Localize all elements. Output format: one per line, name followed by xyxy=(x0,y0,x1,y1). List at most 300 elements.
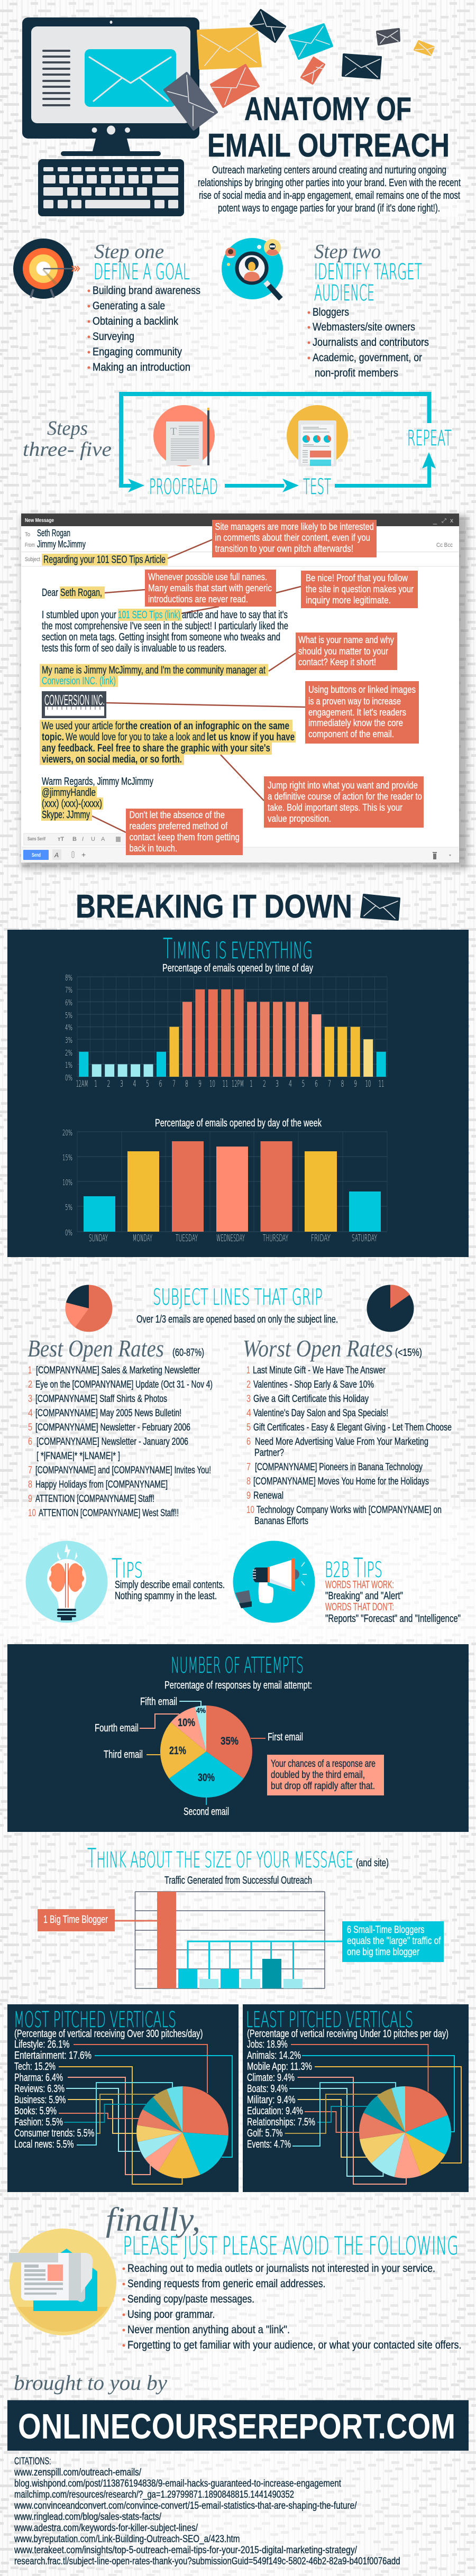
callout: buttons: is a proven way to increase xyxy=(308,695,401,707)
text block: b2b tips xyxy=(325,1553,461,1625)
list: worst open rates: Renewal xyxy=(253,1490,283,1501)
pie chart: responses by attempt: 35% xyxy=(221,1735,239,1747)
email body: compliment paragraph: I stumbled upon your xyxy=(42,609,116,621)
legend list: Reviews: 6.3% xyxy=(14,2083,65,2095)
bar chart: percentage by hour: 1% xyxy=(65,1060,72,1070)
list: worst open rates: Valentines - Shop Early & Save 10% xyxy=(253,1379,374,1390)
callout: your name: should you matter to your xyxy=(298,645,388,657)
bar chart: percentage by hour: 2 xyxy=(107,1079,110,1089)
callout: buttons: engagement. It let's readers xyxy=(308,707,406,718)
callout: jump right in: Jump right into what you want and provide xyxy=(268,780,418,791)
email body: compliment paragraph: article and have to say that it's xyxy=(182,609,288,621)
list: step one goals: Generating a sale xyxy=(93,300,165,312)
pie chart: responses by attempt: Fourth email xyxy=(95,1722,139,1734)
text block: b2b tips: WORDS THAT WORK: xyxy=(325,1579,394,1591)
list: worst open rates: 5 xyxy=(246,1422,251,1433)
legend list xyxy=(247,2039,315,2150)
chart title: time of day: Percentage of emails opened by time of day xyxy=(162,962,313,974)
email body: greeting: Seth Rogan, xyxy=(60,587,102,599)
window title bar: New Message xyxy=(25,518,54,524)
citations: www.terakeet.com/insights/top-5-outreach-email-tips-for-your-2015-digital-marketing-strategy/ xyxy=(14,2545,358,2556)
callout: full names xyxy=(145,570,276,607)
bar chart: percentage by weekday: SATURDAY xyxy=(352,1233,377,1244)
list: worst open rates: 9 xyxy=(246,1490,251,1501)
bar chart: percentage by weekday: 5% xyxy=(65,1203,72,1212)
callout: small time bloggers: one big time blogger xyxy=(347,1947,420,1958)
label: steps proofread test repeat: PROOFREAD xyxy=(149,475,218,499)
callout: small time bloggers xyxy=(342,1921,444,1962)
email toolbar: A xyxy=(101,836,105,842)
list: worst open rates: Worst Open Rates xyxy=(243,1335,393,1362)
bar chart: percentage by hour: 7 xyxy=(172,1079,176,1089)
list: best open rates: Happy Holidays from [COMPANYNAME] xyxy=(35,1479,168,1490)
bar chart: percentage by weekday: SUNDAY xyxy=(89,1233,108,1244)
pie chart: responses by attempt: 30% xyxy=(198,1772,215,1784)
email toolbar: Sans Serif xyxy=(28,836,46,842)
text block: tips xyxy=(112,1553,225,1602)
callout: chances of response: Your chances of a response are xyxy=(271,1758,376,1770)
window title bar xyxy=(21,514,459,526)
subheading: (Percentage of vertical receiving Over 300 pitches/day) xyxy=(14,2028,203,2040)
icon: megaphone in hand xyxy=(233,1541,315,1622)
list: best open rates: 2 xyxy=(28,1379,32,1390)
bar chart: percentage by hour xyxy=(65,973,387,1089)
heading: think about the size xyxy=(87,1843,389,1886)
list: best open rates: 4 xyxy=(28,1408,33,1419)
list: best open rates: Best Open Rates xyxy=(28,1335,164,1362)
heading: finally: finally, xyxy=(106,2201,200,2238)
pie chart: most pitched xyxy=(136,2086,228,2178)
callout: be nice: inquiry more legitimate. xyxy=(306,594,391,606)
pie chart: responses by attempt xyxy=(95,1696,303,1818)
legend list: Climate: 9.4% xyxy=(247,2072,295,2084)
list: best open rates: [COMPANYNAME] May 2005 News Bulletin! xyxy=(35,1408,181,1419)
bar chart: percentage by hour: 8 xyxy=(185,1079,188,1089)
bar chart: percentage by hour: 5 xyxy=(301,1079,305,1089)
text block: tips: TIPS xyxy=(112,1553,143,1584)
logo: conversion inc xyxy=(42,691,106,718)
email body: signature: Warm Regards, Jimmy McJimmy xyxy=(42,776,153,787)
list: best open rates: [COMPANYNAME] Newsletter - February 2006 xyxy=(35,1422,190,1433)
email body: signature: (xxx) (xxx)-(xxxx) xyxy=(42,798,102,810)
text block: intro xyxy=(198,164,461,214)
list: things to avoid: Never mention anything about a "link". xyxy=(127,2324,290,2336)
panel: number of attempts xyxy=(7,1644,469,1832)
icon: proofread document: T xyxy=(170,426,177,437)
list: step one goals xyxy=(88,285,200,373)
legend list: Lifestyle: 26.1% xyxy=(14,2039,70,2050)
legend list: Consumer trends: 5.5% xyxy=(14,2128,95,2139)
legend list: Relationships: 7.5% xyxy=(247,2116,315,2128)
list: worst open rates: Partner? xyxy=(254,1447,284,1459)
list: step two audience: Journalists and contributors xyxy=(313,336,429,349)
bar chart: percentage by weekday: MONDAY xyxy=(133,1233,152,1244)
list: best open rates: [ *|FNAME|* *|LNAME|* ] xyxy=(36,1451,120,1462)
callout: your name: What is your name and why xyxy=(298,634,395,645)
citations: mailchimp.com/resources/research/?_ga=1.29799871.1890848815.1441490352 xyxy=(14,2489,294,2500)
email toolbar: A xyxy=(54,851,59,859)
list: step one goals: Obtaining a backlink xyxy=(93,315,178,327)
legend list: Boats: 9.4% xyxy=(247,2083,288,2095)
legend list: Fashion: 5.5% xyxy=(14,2116,63,2128)
list: step one goals: Making an introduction xyxy=(93,361,190,373)
pie chart: responses by attempt: First email xyxy=(268,1731,303,1743)
email body: value proposition: We used your article for xyxy=(42,720,124,732)
email toolbar: B xyxy=(72,836,77,842)
heading: subject lines that grip xyxy=(136,1284,338,1325)
bar chart: percentage by weekday xyxy=(62,1128,387,1244)
bar chart: percentage by hour: 6% xyxy=(65,998,72,1007)
callout: be nice: the site in question makes your xyxy=(306,583,414,594)
callout: small time bloggers: equals the "large" traffic of xyxy=(347,1936,441,1947)
icon: magnifying glass over people xyxy=(222,238,283,299)
email body: value proposition: We would love for you to take a look and xyxy=(66,731,205,743)
list: worst open rates: 4 xyxy=(246,1408,251,1419)
heading: breaking it down: BREAKING IT DOWN xyxy=(76,888,352,925)
email body: compliment paragraph: 101 SEO Tips (link) xyxy=(118,609,180,621)
bar chart: percentage by hour: 4% xyxy=(65,1023,72,1032)
text block: b2b tips: WORDS THAT DON'T: xyxy=(325,1601,394,1613)
heading: steps three-five: Steps xyxy=(47,417,88,439)
email body: greeting: Dear xyxy=(42,587,58,599)
icon: target with arrow xyxy=(13,239,79,299)
legend list: Military: 9.4% xyxy=(247,2094,296,2106)
list: worst open rates: (<15%) xyxy=(395,1347,422,1359)
citations: CITATIONS: xyxy=(14,2456,51,2467)
list: worst open rates: 2 xyxy=(246,1379,251,1390)
callout: jump right in: a definitive course of action for the reader to xyxy=(268,791,422,802)
list: worst open rates: 10 xyxy=(246,1505,254,1516)
icon: flying envelopes xyxy=(164,10,434,130)
legend list xyxy=(14,2039,95,2150)
list: worst open rates: 3 xyxy=(246,1394,251,1405)
connector lines xyxy=(285,2045,461,2184)
list: worst open rates: 6 xyxy=(246,1436,251,1447)
email body: value proposition: any feedback. Feel free to share the graphic with your site's xyxy=(42,742,270,754)
legend list: Books: 5.9% xyxy=(14,2105,57,2117)
email body: value proposition: the creation of an infographic on the same xyxy=(125,720,289,732)
text block: b2b tips: B2B TIPS xyxy=(325,1553,382,1583)
email address fields: From xyxy=(25,542,35,548)
email toolbar xyxy=(22,833,459,863)
bar chart: percentage by hour: 11 xyxy=(379,1079,384,1089)
panel: most pitched verticals xyxy=(7,2004,239,2192)
email address fields xyxy=(25,528,453,566)
email toolbar: U xyxy=(91,836,95,842)
email body: value proposition: let us know if you have xyxy=(207,731,295,743)
list: best open rates: [COMPANYNAME] and [COMPANYNAME] Invites You! xyxy=(35,1465,211,1476)
callout: buttons: component of the email. xyxy=(308,728,394,739)
heading: number of attempts: NUMBER OF ATTEMPTS xyxy=(171,1653,304,1678)
list: things to avoid: Sending requests from generic email addresses. xyxy=(127,2278,325,2290)
callout: jump right in: value proposition. xyxy=(268,813,331,824)
pie: best open rate xyxy=(66,1285,112,1332)
bar chart: percentage by hour: 9 xyxy=(198,1079,202,1089)
callout: contact methods: back in touch. xyxy=(129,842,177,854)
list: step two audience xyxy=(308,306,429,379)
email body: value proposition xyxy=(40,720,296,765)
bar chart: percentage by hour: 7 xyxy=(328,1079,331,1089)
list: best open rates: 10 xyxy=(28,1508,36,1519)
bar chart: percentage by hour: 1 xyxy=(94,1079,97,1089)
callout: small time bloggers: 6 Small-Time Bloggers xyxy=(347,1924,424,1936)
bar chart: percentage by hour: 4 xyxy=(133,1079,136,1089)
bar chart: percentage by hour: 5% xyxy=(65,1011,72,1020)
bar chart: percentage by weekday: TUESDAY xyxy=(176,1233,198,1244)
email body: greeting xyxy=(42,586,105,599)
window title bar: _ xyxy=(433,517,437,525)
bar chart: percentage by hour: 12PM xyxy=(232,1079,244,1089)
list: worst open rates: Last Minute Gift - We Have The Answer xyxy=(253,1365,386,1376)
pie: worst open rate xyxy=(367,1285,414,1332)
legend list: Entertainment: 17.6% xyxy=(14,2050,91,2061)
bar chart: percentage by weekday: 0% xyxy=(65,1228,72,1237)
bar chart: percentage by hour: 0% xyxy=(65,1073,72,1083)
list: best open rates: [COMPANYNAME] Staff Shirts & Photos xyxy=(35,1394,167,1405)
heading: finally xyxy=(106,2201,459,2261)
callout: full names: introductions are never read. xyxy=(148,593,248,604)
list: best open rates xyxy=(28,1335,213,1519)
email address fields: Subject xyxy=(25,556,40,563)
callout: contact methods xyxy=(126,809,243,855)
list: worst open rates: Valentine's Day Salon and Spa Specials! xyxy=(253,1408,388,1419)
heading: step one: Step one xyxy=(94,241,164,263)
email body: compliment paragraph: tests this form of seo daily is invaluable to us readers. xyxy=(42,643,226,654)
email body: value proposition: viewers, on social media, or so forth. xyxy=(42,754,182,765)
callout: your name xyxy=(296,632,397,670)
list: worst open rates: 7 xyxy=(246,1462,251,1473)
list: best open rates: [COMPANYNAME] Sales & Marketing Newsletter xyxy=(36,1365,200,1376)
email body: compliment paragraph: the most comprehensive I've seen in the subject! I particularly liked the xyxy=(42,620,288,632)
bar chart: percentage by hour: 4 xyxy=(289,1079,292,1089)
pie chart: responses by attempt: 21% xyxy=(169,1745,186,1757)
bar chart: percentage by hour: 5 xyxy=(146,1079,149,1089)
bar chart: percentage by weekday: 10% xyxy=(62,1178,72,1187)
legend list: Pharma: 6.4% xyxy=(14,2072,63,2084)
list: things to avoid: Using poor grammar. xyxy=(127,2308,215,2321)
text block: b2b tips: "Breaking" and "Alert" xyxy=(325,1590,403,1602)
email body: introduction: Conversion INC. (link) xyxy=(42,675,116,687)
list: step two audience: Webmasters/site owners xyxy=(313,321,415,333)
panel: example email window xyxy=(21,514,468,869)
heading: subject lines that grip: SUBJECT LINES THAT GRIP xyxy=(153,1284,323,1310)
icon: desktop computer with keyboard xyxy=(22,17,199,216)
heading: steps three-five: three- five xyxy=(23,438,112,461)
pie chart: responses by attempt: Third email xyxy=(104,1749,143,1761)
list: best open rates: ATTENTION [COMPANYNAME] West Staff!! xyxy=(39,1508,179,1519)
list: worst open rates: Need More Advertising Value From Your Marketing xyxy=(255,1436,428,1447)
callout: contact methods: Don't let the absence of the xyxy=(129,809,225,820)
callout: subject line: in comments about their content, even if you xyxy=(215,532,370,543)
heading: think about the size: Traffic Generated from Successful Outreach xyxy=(164,1875,312,1886)
email body: introduction: My name is Jimmy McJimmy, and I'm the community manager at xyxy=(42,664,266,676)
list: worst open rates: 1 xyxy=(246,1365,250,1376)
list: best open rates: 1 xyxy=(28,1365,32,1376)
callout: buttons xyxy=(305,681,419,744)
legend list: Events: 4.7% xyxy=(247,2139,291,2150)
callout: chances of response: but drop off rapidly after that. xyxy=(271,1781,375,1792)
legend list: Tech: 15.2% xyxy=(14,2061,56,2073)
callout: be nice: Be nice! Proof that you follow xyxy=(306,572,408,583)
bar chart: percentage by hour: 2% xyxy=(65,1048,72,1058)
heading: think about the size: (and site) xyxy=(356,1857,389,1869)
bar chart: percentage by weekday: FRIDAY xyxy=(311,1233,331,1244)
window title bar: x xyxy=(450,517,453,524)
callout: buttons: Using buttons or linked images xyxy=(308,684,416,695)
heading: step one: DEFINE A GOAL xyxy=(94,259,190,285)
citations xyxy=(14,2456,400,2567)
bar chart: percentage by weekday: 15% xyxy=(62,1153,72,1162)
citations: www.adestra.com/keywords-for-killer-subject-lines/ xyxy=(14,2523,198,2534)
legend list: Business: 5.9% xyxy=(14,2094,66,2106)
arrows: repeat loop xyxy=(119,394,436,492)
list: worst open rates xyxy=(243,1335,452,1527)
email body: value proposition: topic. xyxy=(42,731,64,743)
citations: blog.wishpond.com/post/113876194838/9-email-hacks-guaranteed-to-increase-engagement xyxy=(14,2478,342,2489)
email toolbar: Send xyxy=(32,852,41,858)
email body: compliment paragraph xyxy=(42,609,288,654)
bar chart: percentage by hour: 3 xyxy=(120,1079,123,1089)
heading: most pitched: MOST PITCHED VERTICALS xyxy=(14,2007,176,2032)
callout: chances of response: doubled by the third email, xyxy=(271,1770,365,1781)
email toolbar: + xyxy=(81,850,86,859)
list: best open rates: [COMPANYNAME] Newsletter - January 2006 xyxy=(36,1436,188,1447)
bar chart: percentage by hour: 1 xyxy=(250,1079,253,1089)
callout: full names: Whenever possible use full names. xyxy=(148,571,267,582)
legend list: Local news: 5.5% xyxy=(14,2139,74,2150)
list: step two audience: non-profit members xyxy=(315,367,398,379)
list: step one goals: Building brand awareness xyxy=(93,285,200,297)
list: worst open rates: 8 xyxy=(246,1476,251,1487)
bar chart: percentage by hour: 12AM xyxy=(76,1079,88,1089)
callout: jump right in xyxy=(264,776,424,828)
legend list: Education: 9.4% xyxy=(247,2105,303,2117)
bar chart: percentage by weekday: THURSDAY xyxy=(263,1233,288,1244)
email body: introduction xyxy=(40,664,268,687)
callout: contact methods: readers preferred method of xyxy=(129,820,228,831)
bar chart: percentage by hour: 8% xyxy=(65,973,72,983)
heading: steps three-five xyxy=(23,417,112,461)
callout: contact methods: contact keep them from getting xyxy=(129,831,240,842)
bar chart: percentage by hour: 2 xyxy=(263,1079,266,1089)
panel: example email window: CONVERSION INC. xyxy=(44,692,105,708)
list: best open rates: Eye on the [COMPANYNAME] Update (Oct 31 - Nov 4) xyxy=(35,1379,213,1390)
text block: tips: Nothing spammy in the least. xyxy=(115,1590,217,1602)
bar chart: percentage by hour: 10 xyxy=(365,1079,371,1089)
chart title: day of the week: Percentage of emails opened by day of the week xyxy=(155,1117,322,1129)
bar chart: percentage by hour: 6 xyxy=(159,1079,162,1089)
email toolbar: тT xyxy=(58,836,64,842)
list: step two audience: Bloggers xyxy=(313,306,349,318)
list: best open rates: 3 xyxy=(28,1394,32,1405)
bar chart: percentage by hour: 8 xyxy=(341,1079,344,1089)
legend list: Mobile App: 11.3% xyxy=(247,2061,312,2073)
list: best open rates: 8 xyxy=(28,1479,32,1490)
callout: big time blogger: 1 Big Time Blogger xyxy=(43,1914,108,1926)
title: ANATOMY OF xyxy=(244,91,411,127)
label: steps proofread test repeat: TEST xyxy=(303,475,331,499)
callout: be nice xyxy=(301,571,418,608)
subheading: responses: Percentage of responses by email attempt: xyxy=(164,1680,312,1691)
citations: www.byreputation.com/Link-Building-Outreach-SEO_a/423.htm xyxy=(14,2534,240,2545)
title xyxy=(207,91,450,164)
leader lines xyxy=(92,539,305,832)
label: steps proofread test repeat xyxy=(149,426,452,499)
panel: timing is everything xyxy=(7,930,469,1257)
email toolbar: I xyxy=(82,836,84,842)
legend list: Animals: 14.2% xyxy=(247,2050,301,2061)
bar chart: percentage by weekday: WEDNESDAY xyxy=(216,1233,245,1244)
callout: subject line xyxy=(212,520,377,557)
callout: jump right in: take. Bold important steps. This is your xyxy=(268,802,402,813)
connector lines xyxy=(59,2045,232,2184)
email address fields: To xyxy=(25,531,30,538)
pie chart: responses by attempt: Second email xyxy=(184,1806,229,1818)
callout: your name: contact? Keep it short! xyxy=(298,656,376,667)
heading: subject lines that grip: Over 1/3 emails are opened based on only the subject line. xyxy=(136,1314,338,1325)
bar chart: traffic from bloggers xyxy=(115,1892,342,1988)
icon: test analytics tablet xyxy=(287,405,348,466)
text block: tips: Simply describe email contents. xyxy=(115,1579,225,1591)
email body: signature: Skype: JJmmy xyxy=(42,809,90,821)
bar chart: percentage by hour: 10 xyxy=(209,1079,215,1089)
bar chart: percentage by hour: 3 xyxy=(276,1079,279,1089)
list: best open rates: 7 xyxy=(28,1465,32,1476)
list: best open rates: 9 xyxy=(28,1493,32,1505)
callout: big time blogger xyxy=(38,1909,115,1931)
pie chart: responses by attempt: Fifth email xyxy=(140,1696,177,1708)
list: things to avoid: Sending copy/paste messages. xyxy=(127,2293,254,2305)
email body: compliment paragraph: section on meta tags. Getting insight from someone who tweaks and xyxy=(42,631,280,643)
text: brought to you by: brought to you by xyxy=(14,2371,167,2395)
citations: www.zenspill.com/outreach-emails/ xyxy=(14,2467,142,2478)
legend list: Golf: 5.7% xyxy=(247,2128,283,2139)
list: step two audience: Academic, government, or xyxy=(313,352,422,364)
heading: timing: TIMING IS EVERYTHING xyxy=(163,933,313,965)
callout: chances of response xyxy=(267,1755,384,1795)
legend list: Jobs: 18.9% xyxy=(247,2039,288,2050)
heading: step two: Step two xyxy=(314,241,381,263)
citations: www.ringlead.com/blog/sales-stats-facts/ xyxy=(14,2511,162,2523)
bar chart: percentage by hour: 11 xyxy=(222,1079,228,1089)
list: best open rates: 6 xyxy=(28,1436,32,1447)
pie chart: least pitched xyxy=(359,2086,451,2178)
bar chart: percentage by hour: 7% xyxy=(65,985,72,995)
heading: step two xyxy=(314,241,422,306)
email address fields: Seth Rogan xyxy=(37,528,70,538)
email body: signature: @jimmyHandle xyxy=(42,787,96,799)
window title bar: ⤢ xyxy=(442,518,446,524)
bar chart: percentage by hour: 3% xyxy=(65,1035,72,1045)
list: step one goals: Surveying xyxy=(93,331,134,343)
callout: subject line: transition to your own pitch afterwards! xyxy=(215,543,353,554)
list: best open rates: 5 xyxy=(28,1422,32,1433)
pie chart: responses by attempt: 4% xyxy=(196,1706,206,1715)
list: worst open rates: Bananas Efforts xyxy=(254,1516,308,1527)
bar chart: percentage by hour: 6 xyxy=(315,1079,318,1089)
email address fields: Cc Bcc xyxy=(436,542,453,548)
icon: light bulb with brain xyxy=(25,1541,108,1622)
list: best open rates: ATTENTION [COMPANYNAME] Staff! xyxy=(35,1493,154,1505)
heading: step two: AUDIENCE xyxy=(314,280,374,306)
pie chart: responses by attempt: 10% xyxy=(178,1717,195,1729)
callout: full names: Many emails that start with generic xyxy=(148,582,272,593)
email address fields: Regarding your 101 SEO Tips Article xyxy=(43,554,166,566)
list: step one goals: Engaging community xyxy=(93,346,182,358)
icon: letter and envelope xyxy=(9,2229,116,2335)
list: things to avoid xyxy=(123,2262,462,2351)
callout: buttons: immediately know the core xyxy=(308,717,403,728)
